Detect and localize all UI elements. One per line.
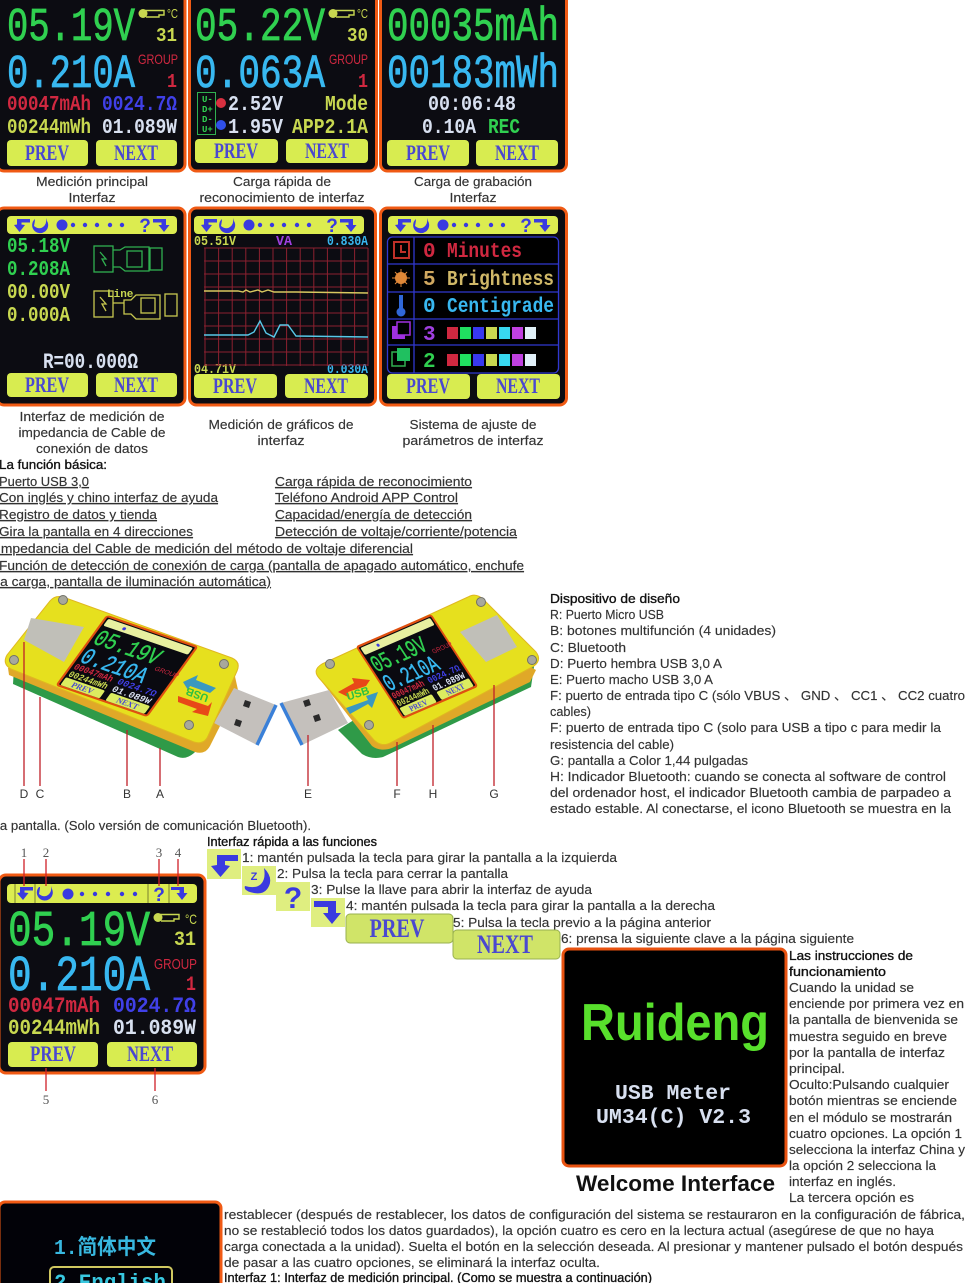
screen: NEXT (444, 681, 467, 697)
icon: thermometer (154, 913, 179, 922)
callout lines and letters: C (36, 787, 45, 801)
model text (596, 1083, 751, 1130)
yellow case (316, 595, 539, 745)
text: continued instructions (224, 1207, 965, 1270)
text: device design list: F: puerto de entrada tipo C (sólo VBUS 、 GND 、 CC1 、 CC2 cuatro (550, 688, 965, 703)
readings (8, 994, 197, 1041)
feature list: Detección de voltaje/corriente/potencia (275, 524, 518, 539)
text: device design list: cables) (550, 704, 591, 719)
screws (10, 596, 228, 730)
readings: 0.000A (7, 305, 70, 328)
button: PREV (387, 373, 470, 399)
screen: GROUP (431, 641, 454, 656)
setting: brightness: 5 (423, 269, 436, 292)
caption: cable impedance: impedancia de Cable de (18, 425, 166, 440)
screen: 01.089W (430, 671, 468, 694)
readings (7, 236, 70, 328)
button: NEXT: NEXT (305, 138, 349, 163)
text: operating instructions: cuatro opciones. La opción 1 (789, 1126, 962, 1141)
button: NEXT: NEXT (495, 140, 539, 165)
screen: 0.210A (73, 645, 154, 690)
text: function 1: 1: mantén pulsada la tecla para girar la pantalla a la izquierda (242, 850, 618, 865)
readings: 00047mAh (8, 994, 100, 1019)
yellow case (5, 596, 238, 743)
screen: 05.19V (366, 632, 433, 679)
green circuit board (338, 640, 535, 758)
graph labels: VA (276, 234, 293, 250)
screen: 00047mAh (390, 679, 427, 702)
icon: help key: ? (284, 882, 302, 915)
group label: GROUP (329, 51, 368, 67)
caption: main measurement: Medición principal (36, 174, 148, 189)
setting: text colour: 2 (423, 351, 436, 374)
screen: GROUP (153, 666, 180, 680)
text: continued instructions: de pasar a las cuatro opciones, se eliminará la interfaz oculta. (224, 1255, 600, 1270)
caption: settings: Sistema de ajuste de (410, 417, 536, 432)
group label: GROUP (154, 956, 197, 973)
setting: background colour (392, 322, 536, 347)
callout lines and letters: H (429, 787, 437, 801)
group label: 1 (358, 71, 368, 93)
text: operating instructions (789, 980, 966, 1205)
caption: settings: parámetros de interfaz (402, 433, 544, 448)
callout numbers and lines: 5 (43, 1092, 49, 1107)
text: operating instructions: la pantalla de bienvenida se (789, 1012, 958, 1027)
text: operating instructions: muestra seguido en breve (789, 1029, 947, 1044)
text: operating instructions: por la pantalla de interfaz (789, 1045, 945, 1060)
icon: rotate right key (311, 898, 345, 927)
callout lines and letters: B (123, 787, 131, 801)
caption: fast charge: reconocimiento de interfaz (200, 190, 364, 205)
feature list: Impedancia del Cable de medición del método de voltaje diferencial (0, 541, 413, 556)
orange spacers (8, 668, 238, 753)
button: PREV (8, 1041, 98, 1067)
callout numbers and lines: 3 (156, 845, 162, 860)
panel: language selection screen (0, 1202, 221, 1283)
button: PREV: PREV (25, 372, 69, 397)
data line readings: APP2.1A (292, 117, 368, 140)
setting: minutes: Minutes (447, 241, 522, 264)
text: continued instructions: no se restableció todos los datos guardados), la opción cuatro es cero en la lectura actual (asegúrese de que no haya (224, 1223, 935, 1238)
callout lines and letters (20, 642, 499, 801)
setting: brightness: Brightness (447, 269, 554, 292)
screen (57, 616, 199, 717)
screen: 00244mWh (395, 687, 432, 709)
label: Line: Line (107, 289, 134, 301)
icon: NEXT key: NEXT (477, 930, 533, 959)
group label (154, 956, 197, 997)
text: function 3: 3: Pulse la llave para abrir la interfaz de ayuda (311, 882, 593, 897)
timer and threshold: 0.10A (422, 117, 476, 140)
screen: NEXT (114, 696, 142, 711)
caption: graph (208, 417, 354, 448)
caption: fast charge (200, 174, 364, 205)
icon: USB arrows (338, 678, 378, 714)
caption: cable impedance: conexión de datos (36, 441, 149, 456)
icon: thermometer (328, 9, 354, 18)
callout lines and letters: A (156, 787, 164, 801)
text: operating instructions: en el módulo se mostrarán (789, 1110, 952, 1125)
callout numbers and lines: 6 (152, 1092, 159, 1107)
icon: help key (276, 882, 310, 915)
reading: current: 0.210A (8, 949, 150, 1006)
icon: data pins: D+ (202, 105, 213, 115)
reading: energy: 00183mWh (387, 49, 559, 102)
readings: capacity and power: 00244mWh (7, 117, 91, 140)
readings: capacity and power: 0024.7Ω (102, 94, 177, 117)
text: device design list: R: Puerto Micro USB (550, 607, 664, 622)
heading: quick functions: Interfaz rápida a las funciones (207, 834, 377, 849)
reading: voltage: 05.19V (8, 904, 150, 961)
model text: UM34(C) V2.3 (596, 1107, 751, 1130)
button: PREV: PREV (30, 1041, 76, 1066)
setting: background colour: 3 (423, 324, 436, 347)
text: operating instructions: interfaz en inglés. (789, 1174, 896, 1189)
group label: 1 (186, 974, 196, 997)
model text: USB Meter (615, 1083, 731, 1106)
group label (138, 51, 178, 93)
text: operating instructions: botón mientras se enciende (789, 1093, 957, 1108)
reading: voltage: 05.19V (7, 2, 135, 55)
text: device design list: del ordenador host, el indicador Bluetooth cambia de parpadeo a (550, 785, 952, 800)
heading: operating instructions: funcionamiento (789, 964, 886, 979)
heading: operating instructions (789, 948, 913, 979)
toolbar: ? (139, 216, 151, 237)
screen: 0.210A (378, 651, 446, 698)
caption: main measurement (36, 174, 148, 205)
orange spacers (322, 640, 536, 750)
button: PREV: PREV (25, 140, 69, 165)
reading: voltage: 05.22V (195, 2, 325, 55)
temperature reading: °C (357, 6, 368, 21)
feature list: Puerto USB 3,0 (0, 474, 89, 489)
setting: minutes: 0 (423, 241, 436, 264)
text: function 2: 2: Pulsa la tecla para cerrar la pantalla (277, 866, 509, 881)
icon: PREV key (346, 914, 453, 943)
panel: fast charge recognition screen (190, 0, 376, 171)
icon: data pins: U+ (202, 125, 213, 135)
readings: 01.089W (113, 1016, 197, 1041)
panel: welcome screen (563, 949, 786, 1166)
text: device design list: estado estable. Al conectarse, el icono Bluetooth se muestra en la (550, 801, 952, 816)
caption: fast charge: Carga rápida de (233, 174, 331, 189)
temperature reading: °C (185, 911, 197, 927)
icon: data pins (198, 92, 216, 135)
text: device design list: D: Puerto hembra USB 3,0 A (550, 656, 722, 671)
callout lines and letters: D (20, 787, 29, 801)
text: function 4: 4: mantén pulsada la tecla para girar la pantalla a la derecha (346, 898, 716, 913)
toolbar: ? (326, 216, 338, 237)
button: NEXT: NEXT (127, 1041, 173, 1066)
feature list: Gira la pantalla en 4 direcciones (0, 524, 194, 539)
text: operating instructions: enciende por primera vez en (789, 996, 964, 1011)
text: device design list: G: pantalla a Color 1,44 pulgadas (550, 753, 749, 768)
panel: annotated main screen (0, 875, 205, 1073)
temperature reading: °C (167, 6, 178, 21)
icon: sleep key (242, 866, 276, 895)
text: device design list: B: botones multifunción (4 unidades) (550, 623, 776, 638)
text: operating instructions: Oculto:Pulsando cualquier (789, 1077, 950, 1092)
icon: direct connection (94, 246, 162, 272)
reading: current: 0.210A (7, 49, 136, 102)
caption: recording: Interfaz (450, 190, 496, 205)
caption: welcome interface: Welcome Interface (576, 1171, 775, 1196)
text: function 6: 6: prensa la siguiente clave a la página siguiente (561, 931, 854, 946)
callout lines and letters: E (304, 787, 312, 801)
icon: NEXT key (453, 930, 560, 959)
button: PREV: PREV (213, 373, 257, 398)
group label: GROUP (138, 51, 178, 67)
feature list: Con inglés y chino interfaz de ayuda (0, 490, 219, 505)
feature list: Registro de datos y tienda (0, 507, 158, 522)
caption: graph: interfaz (258, 433, 304, 448)
caption: cable impedance (18, 409, 166, 456)
icon: data pins: U- (202, 95, 213, 105)
button: PREV: PREV (406, 373, 450, 398)
callout lines and letters: F (393, 787, 401, 801)
readings: 0024.7Ω (113, 994, 196, 1019)
graph labels: 0.030A (327, 362, 368, 378)
feature list: Carga rápida de reconocimiento (275, 474, 472, 489)
setting: minutes (394, 241, 522, 264)
group label: 1 (167, 71, 177, 93)
toolbar (388, 216, 558, 237)
button: PREV: PREV (214, 138, 258, 163)
data line readings: 1.95V (228, 117, 283, 140)
text: continued instructions: carga conectada a la unidad). Suelta el botón en la selección deseada. Al presionar y mantener pulsado el botón después (224, 1239, 964, 1254)
icon: USB arrows: USB (345, 685, 371, 703)
screen: PREV (407, 697, 430, 713)
photo: USB meter right view (281, 595, 539, 758)
timer and threshold: REC (488, 117, 520, 140)
temperature reading: 31 (156, 25, 177, 47)
USB male plug (214, 688, 276, 745)
option: Chinese: 1.简体中文 (54, 1235, 156, 1261)
callout lines and letters: G (489, 787, 499, 801)
text: operating instructions: la opción 2 selecciona la (789, 1158, 937, 1173)
graph labels: 04.71V (194, 362, 236, 378)
screen: 01.089W (109, 684, 154, 707)
text: operating instructions: Cuando la unidad se (789, 980, 914, 995)
caption: recording (414, 174, 532, 205)
screen: 0024.7Ω (114, 677, 159, 699)
USB female port (460, 615, 517, 662)
photo: USB meter left view (5, 596, 276, 758)
readings: 00.00V (7, 282, 70, 305)
data line readings: 2.52V (228, 94, 283, 117)
icon: cable connection (94, 291, 177, 319)
screen: 00244mWh (66, 669, 111, 692)
screws (326, 598, 536, 730)
panel: cable impedance screen (0, 208, 185, 405)
caption: cable impedance: Interfaz de medición de (20, 409, 164, 424)
readings: 0.208A (7, 259, 70, 282)
text: operating instructions: principal. (789, 1061, 845, 1076)
timer and threshold (422, 94, 520, 140)
reading: capacity: 00035mAh (387, 2, 559, 55)
feature list: la carga, pantalla de iluminación automática) (0, 574, 271, 589)
data line readings (216, 94, 368, 140)
text: operating instructions: La tercera opción es (789, 1190, 915, 1205)
feature list: Teléfono Android APP Control (275, 490, 458, 505)
graph labels: 0.830A (327, 234, 368, 250)
brand name: Ruideng (581, 994, 769, 1052)
callout numbers and lines: 2 (43, 845, 49, 860)
icon: data pins: D- (202, 115, 213, 125)
icon: PREV key: PREV (370, 914, 425, 943)
text: operating instructions: selecciona la interfaz China y (789, 1142, 966, 1157)
panel: main measurement screen (0, 0, 185, 171)
caption: recording: Carga de grabación (414, 174, 532, 189)
toolbar: ? (520, 216, 532, 237)
callout numbers and lines: 4 (175, 845, 182, 860)
button: NEXT (107, 1041, 197, 1067)
text: function 5: 5: Pulsa la tecla previo a la página anterior (453, 915, 712, 930)
line chart (204, 248, 368, 366)
icon: thermometer (138, 9, 164, 18)
readings: capacity and power (7, 94, 177, 140)
temperature reading (347, 6, 368, 47)
readings: capacity and power: 00047mAh (7, 94, 91, 117)
timer and threshold: 00:06:48 (428, 94, 516, 117)
setting: text colour (392, 348, 536, 374)
green circuit board (13, 668, 219, 758)
setting: brightness (392, 269, 554, 292)
readings: capacity and power: 01.089W (102, 117, 177, 140)
caption: main measurement: Interfaz (68, 190, 116, 205)
text: device design list: F: puerto de entrada tipo C (solo para USB a tipo c para medir la (550, 720, 942, 735)
settings table (388, 237, 558, 374)
panel: recording screen (380, 0, 566, 171)
setting: centigrade: Centigrade (447, 296, 554, 319)
feature list: Capacidad/energía de detección (275, 507, 472, 522)
reading: current: 0.063A (195, 49, 326, 102)
callout numbers and lines: 1 (21, 845, 27, 860)
button: NEXT: NEXT (114, 140, 158, 165)
readings: 05.18V (7, 236, 70, 259)
screen: 0024.7Ω (426, 663, 463, 686)
button: NEXT: NEXT (114, 372, 158, 397)
screen: PREV (69, 680, 96, 696)
icon: USB arrows (178, 675, 216, 716)
text: device design list (0, 607, 965, 833)
caption: graph: Medición de gráficos de (208, 417, 354, 432)
graph labels (194, 234, 368, 378)
setting: centigrade: 0 (423, 296, 436, 319)
graph labels: 05.51V (194, 234, 236, 250)
heading: basic functions: La función básica: (0, 457, 107, 472)
caption: settings (402, 417, 544, 448)
toolbar (7, 216, 177, 237)
icon: USB arrows: USB (184, 684, 210, 704)
text: device design list: C: Bluetooth (550, 640, 626, 655)
text: continued instructions: restablecer (después de restablecer, los datos de configuración del sistema se restauraron en la configuración de fábrica, (224, 1207, 965, 1222)
USB female port (24, 618, 84, 662)
callout numbers and lines (21, 845, 182, 1107)
temperature reading: 30 (347, 25, 368, 47)
feature list: Función de detección de conexión de carga (pantalla de apagado automático, enchufe (0, 558, 524, 573)
toolbar (7, 884, 197, 906)
panel: graph screen (190, 208, 376, 405)
screen: 05.19V (87, 627, 167, 671)
temperature reading (174, 911, 197, 952)
text: device design list: la pantalla. (Solo versión de comunicación Bluetooth). (0, 818, 311, 833)
text: device design list: E: Puerto macho USB 3,0 A (550, 672, 713, 687)
data line readings: Mode (325, 94, 368, 117)
text: device design list: resistencia del cable) (550, 737, 674, 752)
button: PREV: PREV (406, 140, 450, 165)
text: device design list: H: Indicador Bluetooth: cuando se conecta al software de control (550, 769, 946, 784)
panel: settings screen (380, 208, 566, 405)
setting: centigrade (396, 295, 554, 319)
icon: sleep key: Z (251, 871, 258, 883)
toolbar (194, 216, 364, 237)
heading: operating instructions: Las instrucciones de (789, 948, 913, 963)
feature list (0, 474, 524, 589)
toolbar: ? (153, 885, 165, 906)
screen: 00047mAh (71, 662, 116, 684)
resistance reading: R=00.000Ω (43, 350, 138, 375)
screen (357, 614, 479, 718)
button: NEXT: NEXT (304, 373, 348, 398)
temperature reading (156, 6, 178, 47)
icon: rotate left key (207, 849, 241, 879)
USB male plug (281, 690, 348, 745)
readings: 00244mWh (8, 1016, 100, 1041)
button: NEXT: NEXT (496, 373, 540, 398)
group label (329, 51, 368, 93)
heading: device design: Dispositivo de diseño (550, 591, 680, 606)
temperature reading: 31 (174, 929, 196, 952)
